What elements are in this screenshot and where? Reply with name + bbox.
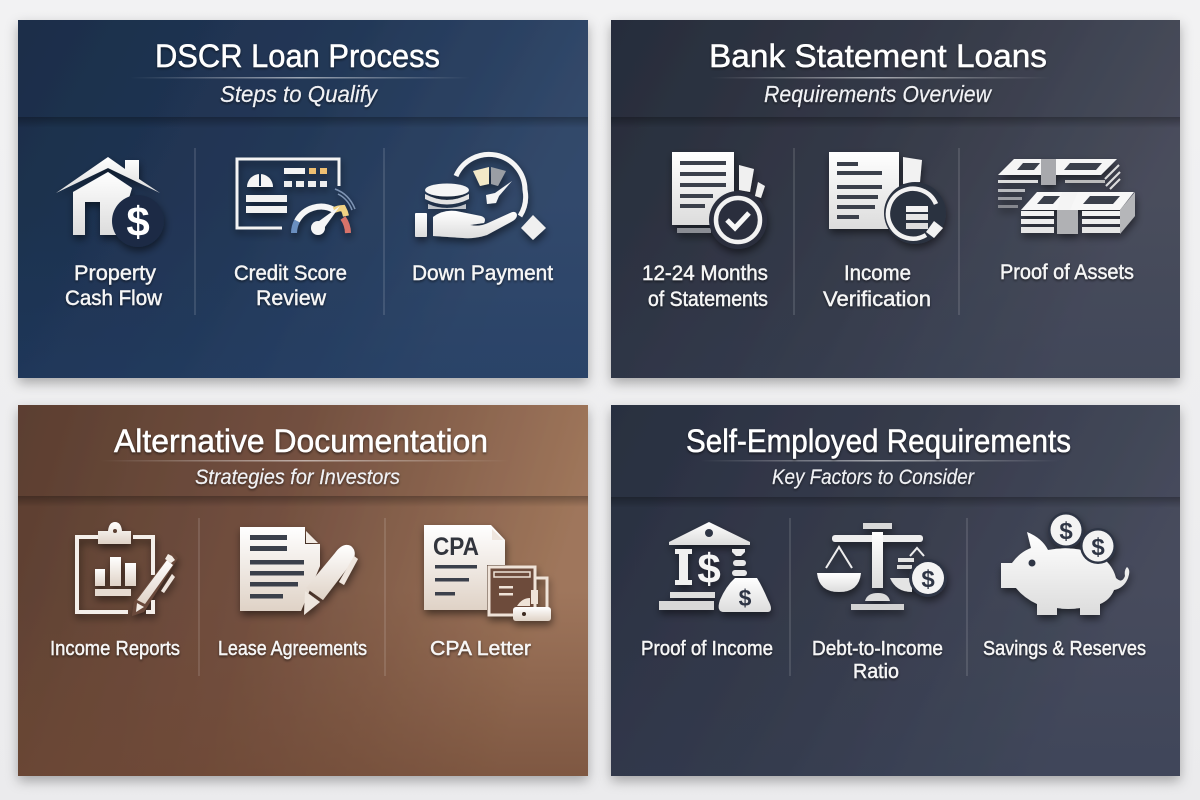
icon: balance scale with coin — [817, 523, 947, 610]
icon: clipboard with chart and pencil — [77, 522, 178, 616]
label: 12-24 Months of Statements: of Statements — [648, 288, 768, 311]
panel: Bank Statement Loans — [611, 20, 1180, 378]
label: Credit Score Review: Credit Score — [234, 262, 347, 285]
label: Credit Score Review: Review — [256, 287, 327, 310]
icon: credit report with gauge — [237, 159, 355, 235]
icon: lease agreement with pen — [240, 527, 358, 615]
icon: stacks of cash — [998, 159, 1135, 234]
panel: Alternative Documentation — [18, 405, 588, 776]
label: Income Verification — [823, 262, 931, 311]
icon: coins in hand with magnifier — [415, 154, 546, 240]
label: Property Cash Flow: Cash Flow — [65, 287, 163, 310]
subheading: Steps to Qualify: Steps to Qualify — [220, 81, 378, 107]
label: Debt-to-Income Ratio: Ratio — [853, 661, 899, 683]
icon: income verification document — [829, 152, 946, 244]
label: 12-24 Months of Statements — [642, 262, 768, 311]
panel: Self-Employed Requirements — [611, 405, 1180, 776]
heading: Alternative Documentation: Alternative Documentation — [114, 423, 488, 459]
icon: bank with money bag: $ — [697, 545, 721, 592]
label: CPA Letter: CPA Letter — [430, 638, 531, 660]
icon: bank with money bag — [659, 522, 771, 612]
icon: house with dollar: $ — [126, 198, 150, 245]
label: Down Payment: Down Payment — [412, 262, 553, 285]
label: Savings & Reserves: Savings & Reserves — [983, 638, 1146, 660]
icon: piggy bank with coins — [1001, 512, 1129, 615]
heading: Bank Statement Loans: Bank Statement Loans — [709, 38, 1047, 74]
label: Proof of Income: Proof of Income — [641, 638, 773, 660]
heading: DSCR Loan Process: DSCR Loan Process — [155, 38, 440, 74]
label: Proof of Assets: Proof of Assets — [1000, 261, 1134, 284]
icon: balance scale with coin: $ — [921, 566, 935, 593]
label: Lease Agreements: Lease Agreements — [218, 638, 367, 660]
label: Debt-to-Income Ratio — [812, 638, 943, 683]
icon: bank with money bag: $ — [739, 585, 752, 611]
icon: CPA letter documents — [424, 525, 551, 621]
subheading: Requirements Overview: Requirements Overview — [764, 81, 992, 107]
panel: DSCR Loan Process — [18, 20, 588, 378]
label: Income Verification: Verification — [823, 288, 931, 311]
label: Income Verification: Income — [844, 262, 911, 285]
subheading: Strategies for Investors: Strategies for Investors — [195, 466, 400, 489]
label: Property Cash Flow: Property — [74, 262, 157, 285]
label: Property Cash Flow — [65, 262, 163, 310]
icon: house with dollar — [56, 157, 164, 247]
label: 12-24 Months of Statements: 12-24 Months — [642, 262, 768, 285]
icon: piggy bank with coins: $ — [1059, 518, 1073, 545]
label: Credit Score Review — [234, 262, 347, 310]
icon: piggy bank with coins: $ — [1091, 534, 1105, 561]
label: Income Reports: Income Reports — [50, 638, 180, 660]
subheading: Key Factors to Consider: Key Factors to Consider — [772, 466, 975, 489]
heading: Self-Employed Requirements: Self-Employed Requirements — [686, 423, 1071, 459]
icon: CPA letter documents: CPA — [433, 533, 479, 561]
icon: statements with check — [672, 152, 767, 249]
label: Debt-to-Income Ratio: Debt-to-Income — [812, 638, 943, 660]
